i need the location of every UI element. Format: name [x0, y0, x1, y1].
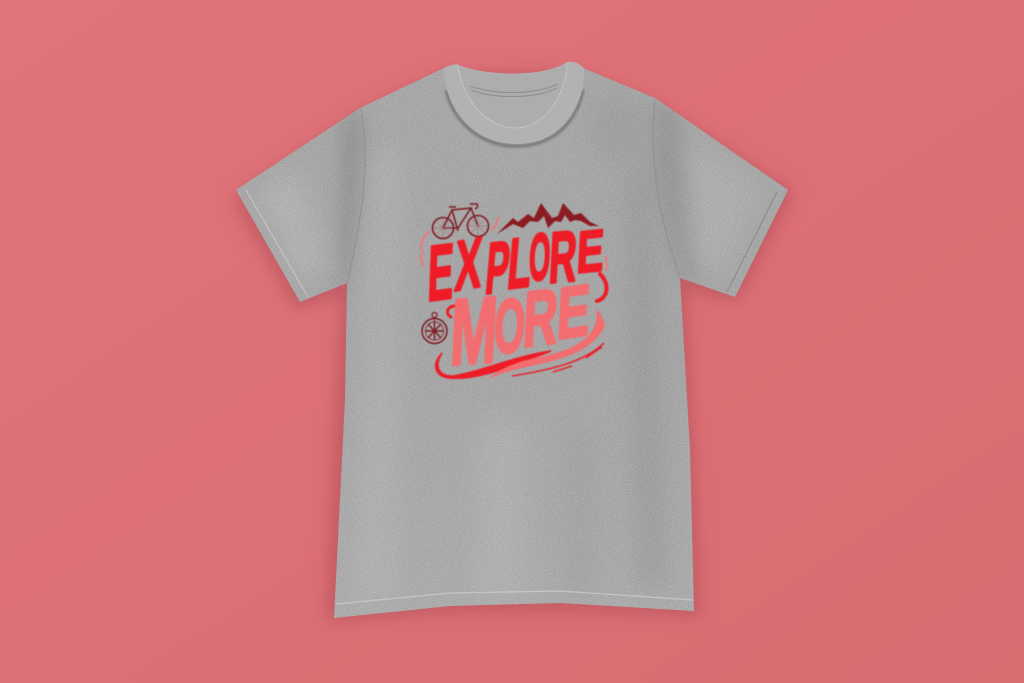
bottom hem	[336, 591, 693, 604]
icon: mountains	[497, 203, 599, 234]
right sleeve hem	[727, 192, 777, 292]
right sleeve seam	[653, 99, 680, 278]
EXPLORE lettering: O	[527, 219, 552, 294]
EXPLORE lettering: X	[453, 224, 484, 307]
t-shirt	[236, 62, 788, 618]
swash: pink	[488, 309, 605, 379]
swash: right hook	[597, 274, 606, 301]
EXPLORE lettering: E	[426, 228, 455, 319]
collar shadow	[446, 90, 583, 146]
left sleeve seam	[347, 108, 365, 283]
swash: red	[436, 351, 551, 378]
EXPLORE lettering	[426, 216, 606, 319]
shirt folds	[236, 68, 786, 618]
shirt shadow	[232, 72, 794, 622]
swash: small curl	[448, 306, 454, 317]
shirt body	[236, 68, 788, 618]
collar rib	[444, 62, 584, 144]
inner neck tape	[470, 84, 558, 93]
EXPLORE lettering: R	[547, 216, 579, 299]
icon: bicycle	[432, 204, 488, 238]
swash: lower lines	[512, 343, 604, 376]
collar	[444, 62, 584, 146]
left sleeve hem	[246, 190, 308, 297]
MORE lettering: M	[448, 278, 500, 386]
MORE lettering: O	[492, 282, 527, 369]
MORE lettering: E	[555, 270, 592, 355]
icon: compass	[422, 312, 447, 344]
MORE lettering: R	[521, 272, 560, 364]
swash: left arc	[420, 217, 607, 271]
graphic print	[420, 203, 607, 386]
EXPLORE lettering: L	[505, 223, 535, 305]
rib edge	[458, 63, 567, 128]
inner neck	[458, 63, 567, 128]
EXPLORE lettering: E	[575, 217, 606, 286]
MORE lettering	[448, 270, 592, 386]
EXPLORE lettering: P	[483, 227, 513, 311]
